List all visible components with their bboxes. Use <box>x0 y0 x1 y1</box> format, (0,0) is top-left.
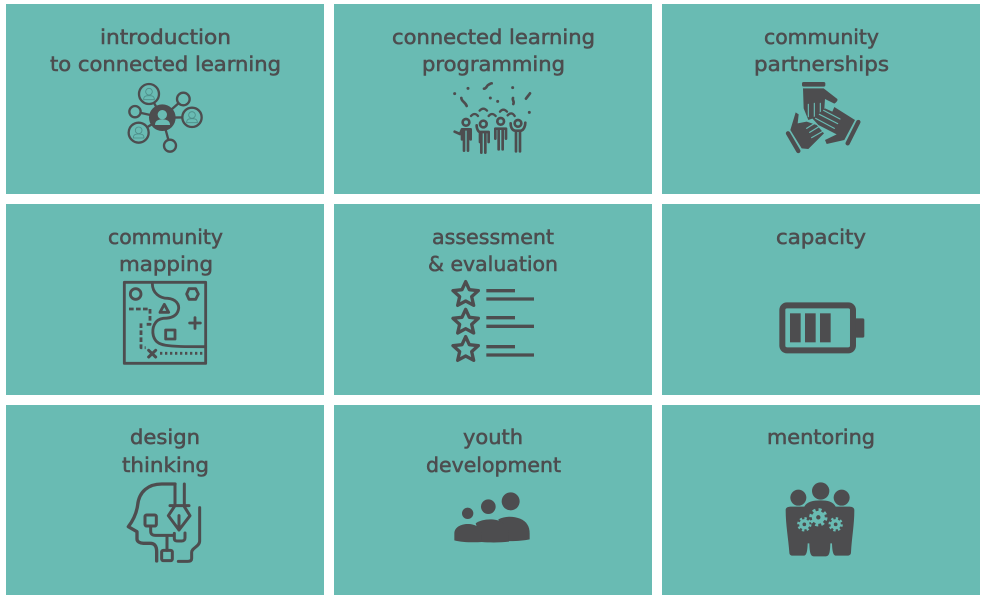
heading: youth development <box>426 425 561 477</box>
panel: community partnerships <box>662 4 980 194</box>
icon: celebrating crowd with confetti <box>453 83 531 153</box>
heading: mentoring: mentoring <box>767 425 875 449</box>
heading: community mapping: community <box>108 225 223 249</box>
heading: community partnerships <box>754 25 889 76</box>
heading: introduction to connected learning: to connected learning <box>50 52 281 76</box>
heading: community mapping: mapping <box>119 252 213 276</box>
icon: treasure map <box>124 282 206 363</box>
heading: connected learning programming: connected learning <box>392 25 595 49</box>
panel: capacity <box>662 204 980 395</box>
panel: introduction to connected learning <box>6 4 324 194</box>
panel: mentoring <box>662 405 980 595</box>
icon: battery <box>782 305 864 350</box>
panel: youth development <box>334 405 652 595</box>
panel: connected learning programming <box>334 4 652 194</box>
heading: youth development: development <box>426 453 561 477</box>
heading: community partnerships: partnerships <box>754 52 889 76</box>
heading: design thinking: thinking <box>122 453 209 477</box>
icon: connected network of people <box>129 84 202 152</box>
heading: design thinking <box>122 425 209 477</box>
icon: star rating list <box>453 282 534 360</box>
heading: assessment & evaluation <box>428 225 558 276</box>
panel: design thinking <box>6 405 324 595</box>
icon: head with pen nib and flow diagram <box>128 484 200 561</box>
icon: group of three growing people <box>454 492 530 542</box>
heading: youth development: youth <box>463 425 523 449</box>
icon: team with gears <box>786 482 854 556</box>
heading: community mapping <box>108 225 223 276</box>
heading: capacity: capacity <box>776 225 866 249</box>
heading: introduction to connected learning: introduction <box>100 25 231 49</box>
heading: community partnerships: community <box>764 25 879 49</box>
heading: connected learning programming: programming <box>422 52 565 76</box>
panel: assessment & evaluation <box>334 204 652 395</box>
icon: three joined hands <box>788 82 858 151</box>
panel: community mapping <box>6 204 324 395</box>
heading: connected learning programming <box>392 25 595 76</box>
heading: introduction to connected learning <box>50 25 281 76</box>
heading: assessment & evaluation: assessment <box>432 225 554 249</box>
heading: design thinking: design <box>130 425 200 449</box>
heading: assessment & evaluation: & evaluation <box>428 252 558 276</box>
